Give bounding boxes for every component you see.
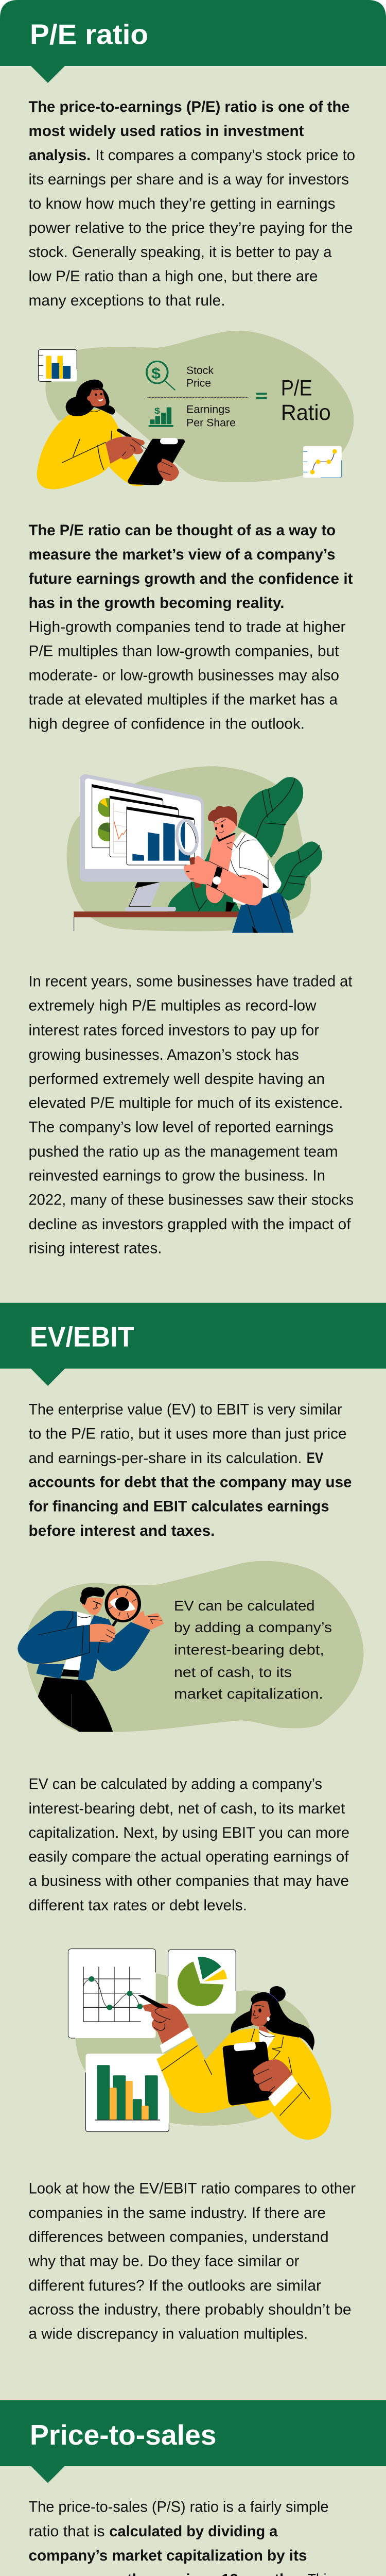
text block: EV/EBIT introduction: before interest and taxes. — [29, 1522, 215, 1539]
text block: P/E introduction: The price-to-earnings (P/E) ratio is one of the — [29, 98, 350, 115]
text block: market view of growth: future earnings growth and the confidence it — [29, 570, 353, 587]
text block: market view of growth: high degree of confidence in the outlook. — [29, 715, 305, 733]
text block: P/E introduction: many exceptions to that rule. — [29, 292, 225, 309]
text block: P/E introduction: stock. Generally speaking, it is better to pay a — [29, 244, 332, 261]
text block: market view of growth: P/E multiples than low-growth companies, but — [29, 643, 339, 659]
callout: EV can be calculated: interest-bearing debt, — [174, 1642, 324, 1658]
text block: compare to industry: Look at how the EV/EBIT ratio compares to other — [29, 2180, 356, 2197]
text block: P/E introduction: most widely used ratios in investment — [29, 123, 304, 140]
text block: P/S introduction: ratio that is — [29, 2523, 105, 2540]
illustration: man with magnifier and EV callout — [17, 1561, 364, 1732]
text block: P/E introduction: power relative to the price they’re paying for the — [29, 219, 353, 236]
illustration: P/E formula with woman and clipboard: Stock — [186, 365, 214, 377]
text block: EV calculation: different tax rates or debt levels. — [29, 1897, 247, 1914]
text block: compare to industry: across the industry, there probably shouldn’t be — [29, 2301, 351, 2318]
text block: recent high multiples: decline as investors grappled with the impact of — [29, 1216, 351, 1233]
text block: EV calculation: a business with other companies that may have — [29, 1873, 349, 1890]
text block: P/E introduction: to know how much they’re getting in earnings — [29, 195, 336, 212]
callout: EV can be calculated: by adding a company’s — [174, 1619, 332, 1635]
panel: P/E ratio section — [0, 0, 386, 1257]
text block: recent high multiples: growing businesses. Amazon’s stock has — [29, 1046, 299, 1063]
text block: P/E introduction: its earnings per share and is a way for investors — [29, 171, 349, 188]
illustration: P/E formula with woman and clipboard: Per Share — [186, 417, 236, 429]
text block: recent high multiples: performed extremely well despite having an — [29, 1071, 325, 1088]
text block: recent high multiples: interest rates forced investors to pay up for — [29, 1022, 319, 1039]
callout: EV can be calculated: market capitalization. — [174, 1686, 323, 1702]
text block: recent high multiples: elevated P/E multiple for much of its existence. — [29, 1094, 343, 1112]
text block: EV calculation: interest-bearing debt, net of cash, to its market — [29, 1800, 345, 1817]
text block: EV/EBIT introduction: for financing and EBIT calculates earnings — [29, 1498, 329, 1515]
text block: P/S introduction: company’s market capitalization by its — [29, 2547, 307, 2564]
text block: P/S introduction — [29, 2499, 348, 2576]
text block: P/E introduction: analysis. — [29, 147, 91, 164]
text block: EV calculation — [29, 1776, 349, 1914]
illustration: P/E formula with woman and clipboard: $ — [154, 406, 161, 416]
text block: recent high multiples: 2022, many of these businesses saw their stocks — [29, 1192, 354, 1209]
illustration: P/E formula with woman and clipboard — [37, 331, 354, 489]
text block: recent high multiples: The company’s low level of reported earnings — [29, 1119, 334, 1136]
heading banner: EV/EBIT: EV/EBIT — [30, 1321, 134, 1353]
text block: EV calculation: capitalization. Next, by using EBIT you can more — [29, 1824, 349, 1841]
text block: recent high multiples: In recent years, some businesses have traded at — [29, 973, 353, 990]
text block: EV/EBIT introduction — [29, 1401, 352, 1539]
illustration: P/E formula with woman and clipboard: Earnings — [186, 404, 230, 416]
text block: market view of growth: moderate- or low-growth businesses may also — [29, 667, 339, 684]
text block: compare to industry: different futures? If the outlooks are similar — [29, 2277, 321, 2294]
illustration: P/E formula with woman and clipboard: Ratio — [281, 400, 331, 425]
text block: P/S introduction: calculated by dividing a — [109, 2523, 278, 2540]
callout: EV can be calculated: EV can be calculated — [174, 1598, 315, 1614]
text block: recent high multiples: extremely high P/E multiples as record-low — [29, 997, 317, 1014]
panel: Price-to-sales section — [0, 2400, 386, 2576]
illustration: P/E formula with woman and clipboard: $ — [151, 365, 161, 382]
text block: P/E introduction: low P/E ratio than a high one, but there are — [29, 268, 318, 285]
callout: EV can be calculated: net of cash, to its — [174, 1664, 292, 1680]
heading banner: Price-to-sales: Price-to-sales — [30, 2419, 216, 2451]
text block: market view of growth: The P/E ratio can be thought of as a way to — [29, 522, 336, 539]
heading banner: Price-to-sales — [0, 2400, 386, 2483]
text block: compare to industry: a wide discrepancy in valuation multiples. — [29, 2326, 308, 2342]
text block: market view of growth: trade at elevated multiples if the market has a — [29, 691, 338, 708]
text block: P/S introduction: The price-to-sales (P/S) ratio is a fairly simple — [29, 2499, 328, 2516]
text block: compare to industry: why that may be. Do they face similar or — [28, 2253, 300, 2270]
illustration: P/E formula with woman and clipboard: Price — [186, 378, 211, 389]
heading banner: EV/EBIT — [0, 1303, 386, 1386]
text block: EV/EBIT introduction: accounts for debt that the company may use — [29, 1473, 352, 1491]
text block: market view of growth: has in the growth becoming reality. — [29, 595, 284, 612]
text block: recent high multiples: reinvested earnings to grow the business. In — [29, 1167, 325, 1184]
text block: EV/EBIT introduction: and earnings-per-share in its calculation. — [29, 1450, 302, 1467]
text block: recent high multiples: pushed the ratio up as the management team — [29, 1143, 338, 1160]
panel: EV/EBIT section — [0, 1303, 386, 2342]
text block: recent high multiples — [29, 973, 354, 1257]
callout: EV can be calculated — [174, 1598, 332, 1702]
illustration: woman presenting line, pie and bar charts — [68, 1949, 331, 2140]
illustration: man inspecting monitor charts with magnifier — [67, 766, 322, 933]
text block: compare to industry: differences between companies, understand — [29, 2228, 328, 2245]
heading banner: P/E ratio — [0, 0, 386, 83]
text block: EV/EBIT introduction: The enterprise value (EV) to EBIT is very similar — [29, 1401, 342, 1418]
text block: EV/EBIT introduction: to the P/E ratio, but it uses more than just price — [29, 1426, 347, 1443]
text block: EV calculation: EV can be calculated by adding a company’s — [29, 1776, 322, 1793]
text block: market view of growth — [29, 522, 353, 733]
text block: EV calculation: easily compare the actual operating earnings of — [29, 1849, 349, 1865]
text block: P/E introduction — [29, 98, 355, 309]
heading banner: P/E ratio: P/E ratio — [30, 19, 148, 50]
text block: compare to industry — [28, 2180, 356, 2342]
text block: market view of growth: High-growth companies tend to trade at higher — [29, 618, 346, 636]
text block: compare to industry: companies in the same industry. If there are — [29, 2205, 326, 2222]
illustration: P/E formula with woman and clipboard: P/E — [281, 376, 312, 400]
text block: EV/EBIT introduction: EV — [307, 1450, 323, 1467]
text block: market view of growth: measure the market’s view of a company’s — [29, 546, 336, 563]
text block: P/E introduction: It compares a company’s stock price to — [96, 147, 355, 164]
text block: recent high multiples: rising interest rates. — [29, 1240, 162, 1257]
